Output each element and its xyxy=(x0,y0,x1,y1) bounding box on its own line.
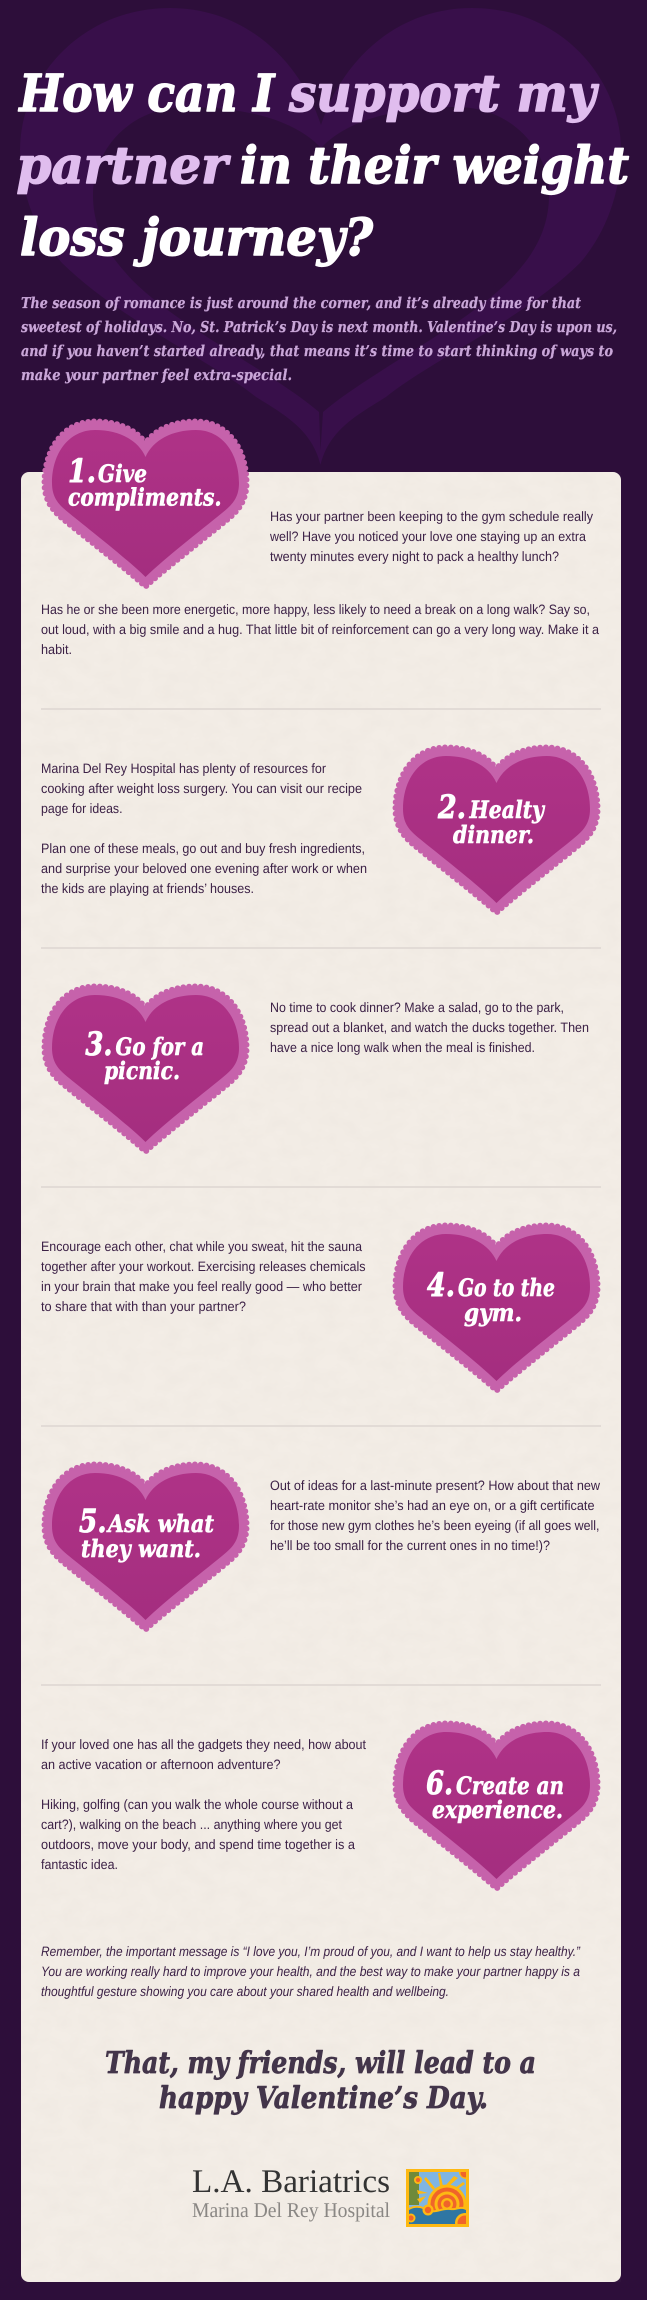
section 6 body text: an active vacation or afternoon adventure? xyxy=(41,1757,281,1772)
section 5: ask what they want xyxy=(44,1464,600,1630)
section 1 body text: well? Have you noticed your love one staying up an extra xyxy=(269,529,586,544)
section 2 body text: the kids are playing at friends’ houses. xyxy=(41,881,254,896)
heart badge 5 xyxy=(44,1464,246,1630)
section 3 body text: spread out a blanket, and watch the ducks together. Then xyxy=(270,1020,589,1035)
section 2 body text xyxy=(41,761,367,896)
section 1 body text: twenty minutes every night to pack a healthy lunch? xyxy=(270,549,559,564)
section 5 body text: Out of ideas for a last-minute present? How about that new xyxy=(270,1478,600,1493)
section 2 body text: Marina Del Rey Hospital has plenty of resources for xyxy=(41,761,326,776)
closing italic message xyxy=(41,1944,581,1999)
section 5 body text: for those new gym clothes he’s been eyeing (if all goes well, xyxy=(270,1518,600,1533)
heart badge 4: gym. xyxy=(464,1298,522,1327)
closing heading xyxy=(105,2046,536,2116)
section 2 body text: and surprise your beloved one evening after work or when xyxy=(41,861,367,876)
section 6: create an experience xyxy=(41,1724,598,1888)
intro paragraph: make your partner feel extra-special. xyxy=(21,366,292,384)
section 4 body text: in your brain that make you feel really good — who better xyxy=(41,1279,362,1294)
heart badge 3 xyxy=(44,986,246,1152)
section 5 body text xyxy=(270,1478,600,1553)
title: support my xyxy=(288,64,599,124)
section 4 body text: to share that with than your partner? xyxy=(41,1299,246,1314)
logo wordmark: Marina Del Rey Hospital xyxy=(192,2198,390,2222)
title: partner xyxy=(16,136,231,196)
section 3 body text: No time to cook dinner? Make a salad, go to the park, xyxy=(270,1000,564,1015)
heart badge 4 xyxy=(396,1226,598,1390)
background heart outline xyxy=(20,8,621,465)
heart badge 1: Give xyxy=(98,459,147,488)
heart badge 1: 1. xyxy=(68,452,96,490)
heart badge 6: experience. xyxy=(432,1795,563,1824)
heart badge 2 xyxy=(396,748,598,912)
title: loss journey? xyxy=(20,208,374,268)
heart badge 5: they want. xyxy=(81,1534,201,1563)
logo wordmark: L.A. Bariatrics xyxy=(192,2164,390,2200)
section 2 body text: Plan one of these meals, go out and buy fresh ingredients, xyxy=(41,841,365,856)
closing italic message: You are working really hard to improve your health, and the best way to make your partner happy is a xyxy=(41,1964,580,1979)
title xyxy=(16,64,629,268)
heart badge 3: picnic. xyxy=(104,1056,180,1085)
section 2 body text: page for ideas. xyxy=(41,801,122,816)
icon: sun and sea logo xyxy=(406,2169,469,2227)
section 6 body text: outdoors, move your body, and spend time together is a xyxy=(41,1837,355,1852)
heart badge 6: Create an xyxy=(456,1771,564,1800)
heart badge 3: Go for a xyxy=(116,1032,204,1061)
heart badge 1: compliments. xyxy=(68,482,222,512)
section 1 body text xyxy=(41,509,599,657)
section 4 body text xyxy=(41,1239,366,1314)
section 1 body text: Has he or she been more energetic, more happy, less likely to need a break on a long walk? Say so, xyxy=(41,602,590,617)
closing italic message: Remember, the important message is “I love you, I’m proud of you, and I want to help us stay healthy.” xyxy=(41,1944,581,1959)
heart badge 5: Ask what xyxy=(106,1509,214,1538)
section 4 body text: together after your workout. Exercising releases chemicals xyxy=(41,1259,366,1274)
intro paragraph xyxy=(21,294,617,384)
section 6 body text xyxy=(41,1737,366,1872)
section 5 body text: he’ll be too small for the current ones in no time!)? xyxy=(270,1538,550,1553)
section 5 body text: heart-rate monitor she’s had an eye on, or a gift certificate xyxy=(270,1498,594,1513)
section 3 body text xyxy=(270,1000,589,1055)
section 1 body text: Has your partner been keeping to the gym schedule really xyxy=(270,509,593,524)
section 2 body text: cooking after weight loss surgery. You can visit our recipe xyxy=(41,781,362,796)
section 6 body text: cart?), walking on the beach ... anything where you get xyxy=(41,1817,342,1832)
section 6 body text: Hiking, golfing (can you walk the whole course without a xyxy=(41,1797,353,1812)
closing heading: That, my friends, will lead to a xyxy=(105,2046,536,2081)
section 3 body text: have a nice long walk when the meal is finished. xyxy=(270,1040,535,1055)
section 4: go to the gym xyxy=(41,1226,598,1390)
section 1: give compliments xyxy=(41,422,599,657)
section 6 body text: If your loved one has all the gadgets they need, how about xyxy=(41,1737,366,1752)
section 1 body text: habit. xyxy=(41,642,72,657)
heart badge 4: 4. xyxy=(427,1266,455,1304)
section 4 body text: Encourage each other, chat while you sweat, hit the sauna xyxy=(41,1239,362,1254)
title: How can I xyxy=(18,64,276,124)
heart badge 2: dinner. xyxy=(453,820,534,849)
heart badge 2: Healty xyxy=(469,795,546,824)
logo wordmark xyxy=(192,2164,390,2222)
heart badge 4: Go to the xyxy=(458,1273,555,1302)
heart badge 1 xyxy=(44,422,246,586)
heart badge 6 xyxy=(396,1724,598,1888)
heart badge 5: 5. xyxy=(79,1502,106,1540)
section 2: healthy dinner xyxy=(41,748,598,912)
section 1 body text: out loud, with a big smile and a hug. That little bit of reinforcement can go a very long way. Make it a xyxy=(41,622,599,637)
heart badge 2: 2. xyxy=(437,788,466,826)
section 3: go for a picnic xyxy=(44,986,589,1152)
heart badge 6: 6. xyxy=(426,1764,453,1802)
closing italic message: thoughtful gesture showing you care about your shared health and wellbeing. xyxy=(41,1984,449,1999)
paper card panel xyxy=(21,472,621,2282)
section 6 body text: fantastic idea. xyxy=(41,1857,118,1872)
heart badge 3: 3. xyxy=(85,1025,112,1063)
closing heading: happy Valentine’s Day. xyxy=(159,2081,488,2116)
